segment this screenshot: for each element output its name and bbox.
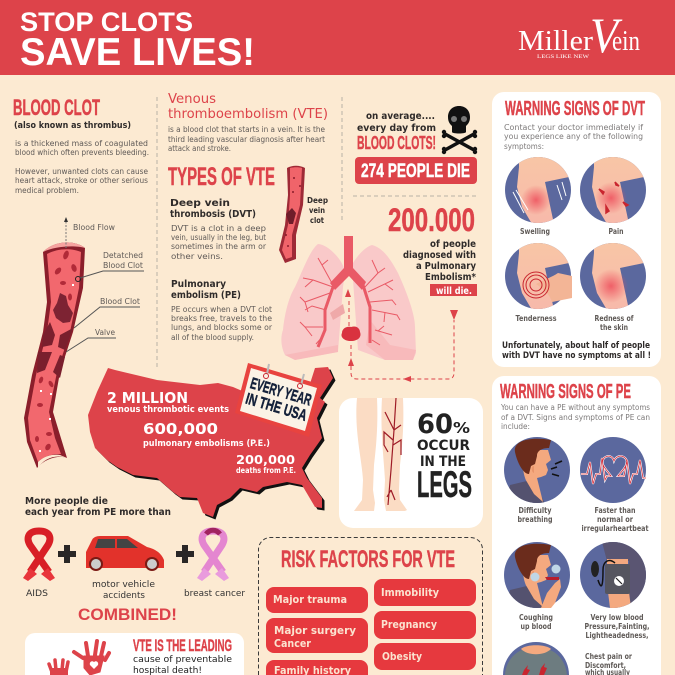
icon: plus <box>176 545 194 563</box>
icon: chest pain <box>503 642 569 675</box>
icon: low blood pressure <box>580 542 646 608</box>
logo: MillerVein: ein <box>612 25 640 57</box>
illustration: legs <box>354 398 407 511</box>
text: more people die: More people die <box>25 496 108 507</box>
vein labels: Blood Clot <box>103 260 144 270</box>
logo: MillerVein: V <box>590 7 623 63</box>
label: heartbeat: Faster than <box>594 506 636 515</box>
stat: 200.000 PE <box>388 202 477 297</box>
vein labels <box>64 217 144 352</box>
label: chest pain: Chest pain or <box>585 652 632 661</box>
valve <box>37 322 73 378</box>
DVT description: sometimes in the arm or <box>171 241 267 251</box>
icon: hands <box>49 641 109 675</box>
icon: heartbeat <box>580 437 646 503</box>
blood clot definition: heart attack, stroke or other serious <box>15 175 148 185</box>
pill: major trauma: Major trauma <box>273 594 347 606</box>
stat: 200.000 PE: Embolism* <box>425 272 477 283</box>
PE description: embolism (PE) <box>171 290 241 301</box>
pill: surgery and cancer <box>266 618 368 653</box>
label: coughing: Coughing <box>519 613 553 622</box>
blood clot definition: (also known as thrombus) <box>14 121 131 131</box>
VTE definition: Venous <box>168 91 216 107</box>
map stats: 600,000 <box>143 420 218 438</box>
PE description: lungs, and blocks some or <box>171 322 273 332</box>
stat: 200.000 PE: 200.000 <box>388 202 475 238</box>
pill: surgery and cancer: Cancer <box>274 638 312 650</box>
map stats <box>107 389 296 475</box>
panel: warning signs of DVT <box>492 92 661 367</box>
PE description: all of the blood supply. <box>171 332 254 342</box>
blood clot definition <box>13 95 149 195</box>
label: AIDS: AIDS <box>26 589 48 599</box>
label: difficulty breathing: Difficulty <box>518 506 552 515</box>
logo: MillerVein <box>518 7 640 63</box>
DVT description: other veins. <box>171 251 223 261</box>
label: low pressure: Lightheadedness, <box>586 631 649 640</box>
label: heartbeat: irregularheartbeat <box>582 524 649 533</box>
label: redness of the skin <box>594 314 634 332</box>
map stats: pulmonary embolisms (P.E.) <box>143 439 270 449</box>
label: swelling: Swelling <box>520 227 550 236</box>
label: difficulty breathing: breathing <box>518 515 552 524</box>
label: motor vehicle accidents <box>92 580 155 601</box>
icon: plus <box>58 545 76 563</box>
icon: breast cancer ribbon <box>197 530 229 581</box>
calendar: every year in the USA: IN THE USA <box>244 391 309 425</box>
logo: MillerVein: Miller <box>518 25 593 57</box>
label: pain: Pain <box>608 227 624 236</box>
label: coughing <box>519 613 553 631</box>
heading: combined: COMBINED! <box>78 605 177 624</box>
label: redness of the skin: Redness of <box>594 314 634 323</box>
label: breast cancer: breast cancer <box>184 589 245 599</box>
pill: immobility <box>374 579 476 606</box>
label: chest pain <box>585 652 632 675</box>
stat: 200.000 PE: a Pulmonary <box>416 261 476 272</box>
VTE definition <box>168 91 328 153</box>
label: difficulty breathing <box>518 506 552 524</box>
blood clot definition: is a thickened mass of coagulated <box>15 138 148 148</box>
label: deep vein clot: clot <box>310 215 324 225</box>
label: deep vein clot: Deep <box>307 195 328 205</box>
pill: pregnancy <box>374 611 476 639</box>
icon: pain <box>580 156 646 224</box>
blood clot mass <box>53 293 73 323</box>
DVT description: DVT is a clot in a deep <box>171 223 266 233</box>
title <box>20 7 255 74</box>
map stats: venous thrombotic events <box>107 405 229 415</box>
blood clot definition: blood which often prevents bleeding. <box>15 147 149 157</box>
stat: blood clots per day: on average.... <box>366 111 435 122</box>
icon: redness <box>580 242 646 310</box>
panel: 60% occur in the legs <box>339 398 483 528</box>
pill: obesity: Obesity <box>382 651 422 663</box>
pill: obesity <box>374 643 476 670</box>
stat: blood clots per day <box>355 111 477 184</box>
label: tenderness: Tenderness <box>516 314 557 323</box>
VTE definition: attack and stroke. <box>168 143 231 153</box>
panel: warning signs of DVT: Unfortunately, about half of people <box>502 341 650 351</box>
calendar: every year in the USA: EVERY YEAR <box>248 375 314 410</box>
PE description: PE occurs when a DVT clot <box>171 304 273 314</box>
VTE definition: is a blood clot that starts in a vein. It is the <box>168 124 325 134</box>
label: coughing: up blood <box>520 622 552 631</box>
panel: warning signs of DVT: Contact your doctor immediately if <box>504 122 644 132</box>
pill: major trauma <box>266 587 368 613</box>
panel: 60% occur in the legs: 60 <box>417 409 453 440</box>
label: low pressure: Pressure,Fainting, <box>584 622 650 631</box>
map stats: deaths from P.E. <box>236 466 296 475</box>
panel: warning signs of DVT: with DVT have no symptoms at all ! <box>502 351 651 361</box>
274 people die pill: 274 PEOPLE DIE <box>361 160 470 182</box>
label: chest pain: Discomfort, <box>585 661 626 670</box>
label: heartbeat: normal or <box>597 515 633 524</box>
text: more people die: each year from PE more than <box>25 507 171 518</box>
title: STOP CLOTS <box>20 7 193 37</box>
label: deep vein clot <box>307 195 328 225</box>
panel: warning signs of PE <box>492 376 661 675</box>
panel: VTE leading cause: VTE IS THE LEADING <box>133 637 232 655</box>
icon: car <box>86 536 164 571</box>
VTE definition: thromboembolism (VTE) <box>168 106 328 122</box>
stat: blood clots per day: every day from <box>357 123 436 134</box>
label: deep vein clot: vein <box>309 205 325 215</box>
label: low pressure: Very low blood <box>590 613 644 622</box>
pill: pregnancy: Pregnancy <box>381 619 437 631</box>
panel: warning signs of DVT: you experience any of the following <box>504 131 643 141</box>
icon: difficulty breathing <box>504 437 570 504</box>
illustration: USA map <box>88 367 336 520</box>
vein labels: Valve <box>95 327 115 337</box>
panel: warning signs of DVT: symptoms: <box>504 141 544 151</box>
illustration: small vein with clot <box>279 166 305 263</box>
panel: 60% occur in the legs: LEGS <box>417 464 472 505</box>
blood clot definition: medical problem. <box>15 185 79 195</box>
stat: blood clots per day: BLOOD CLOTS! <box>357 133 436 153</box>
DVT description <box>170 198 267 261</box>
panel: warning signs of PE: You can have a PE without any symptoms <box>500 402 650 412</box>
icon: coughing up blood <box>504 542 570 609</box>
illustration: vein with clot <box>24 242 85 468</box>
text: more people die <box>25 496 171 518</box>
label: low pressure <box>584 613 650 640</box>
icon: swelling <box>505 156 571 224</box>
heading: types of VTE: TYPES OF VTE <box>168 163 275 191</box>
icon: skull and crossbones <box>442 106 477 154</box>
label: motor vehicle accidents: accidents <box>103 591 145 601</box>
DVT description: vein, usually in the leg, but <box>171 232 267 242</box>
DVT description: Deep vein <box>170 198 230 209</box>
PE description <box>171 279 273 342</box>
blood clot definition: BLOOD CLOT <box>13 95 100 120</box>
vein labels: Blood Flow <box>73 222 115 232</box>
pill: surgery and cancer: Major surgery <box>274 625 356 637</box>
vein labels: Detatched <box>103 250 143 260</box>
title: SAVE LIVES! <box>20 31 255 74</box>
panel: risk factors for VTE: RISK FACTORS FOR VTE <box>281 546 455 573</box>
panel: risk factors for VTE <box>258 538 482 675</box>
pill: immobility: Immobility <box>381 587 439 599</box>
blood clot definition: However, unwanted clots can cause <box>15 166 148 176</box>
VTE definition: third leading vascular diagnosis after heart <box>168 134 326 144</box>
panel: VTE leading cause <box>25 633 244 675</box>
panel: VTE leading cause: cause of preventable <box>133 655 232 665</box>
pill: family history <box>266 660 368 675</box>
label: heartbeat <box>582 506 649 533</box>
stat: 200.000 PE: will die. <box>436 286 472 297</box>
stat: 200.000 PE: of people <box>430 239 476 250</box>
icon: AIDS ribbon <box>23 531 55 581</box>
panel: 60% occur in the legs: % <box>453 419 470 437</box>
DVT description: thrombosis (DVT) <box>170 209 256 220</box>
label: motor vehicle accidents: motor vehicle <box>92 580 155 590</box>
map stats: 200,000 <box>236 453 295 467</box>
logo: MillerVein: LEGS LIKE NEW <box>537 54 590 60</box>
PE description: Pulmonary <box>171 279 226 290</box>
panel: warning signs of PE: of a DVT. Signs and symptoms of PE can <box>501 412 650 422</box>
panel: 60% occur in the legs: IN THE <box>420 454 466 470</box>
illustration: lungs <box>281 236 416 360</box>
panel: 60% occur in the legs: OCCUR <box>417 438 470 454</box>
icon: tenderness <box>505 242 572 310</box>
dashed dividers <box>157 97 476 370</box>
calendar: every year in the USA <box>235 363 322 437</box>
stat: 200.000 PE: diagnosed with <box>403 250 476 261</box>
PE description: breaks free, travels to the <box>171 313 272 323</box>
map stats: 2 MILLION <box>107 389 188 407</box>
vein labels: Blood Clot <box>100 296 141 306</box>
clot and circulation arrows <box>341 289 458 382</box>
header banner <box>0 0 675 75</box>
panel: warning signs of PE: include: <box>501 421 530 431</box>
label: redness of the skin: the skin <box>600 323 628 332</box>
